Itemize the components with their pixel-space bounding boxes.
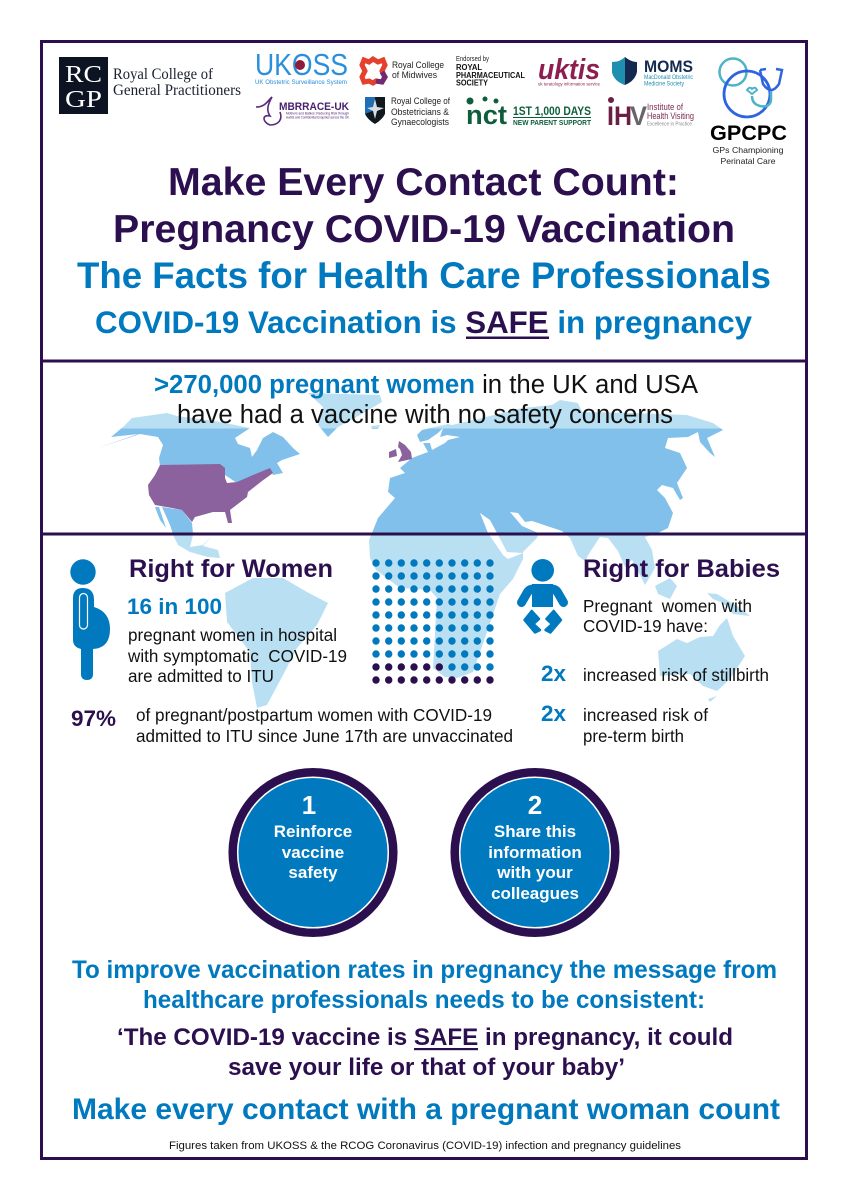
section: vaccine uptake statement: have had a vaccine with no safety concerns [177,401,673,429]
text: unvaccinated: of pregnant/postpartum women with COVID-19 [136,706,492,725]
logo: MOMS: Medicine Society [644,82,684,88]
logo: Royal Pharmaceutical Society [456,56,525,88]
call to action: Make every contact with a pregnant woman count [72,1093,780,1126]
icon: pregnant woman [70,559,110,680]
world map [98,393,750,708]
logo: Institute of Health Visiting: Excellence in Practice [647,122,692,128]
logo: RCGP: GP [65,87,102,113]
logo: MOMS: MacDonald Obstetric [644,75,693,81]
panel: right for babies [522,555,780,746]
stat: pre-term birth: pre-term birth [583,727,684,746]
logo: UKTIS: uk teratology information service [538,82,600,86]
stat: stillbirth [541,661,769,686]
logo: MOMS: MOMS [644,57,693,76]
heading: right for babies: Right for Babies [583,555,780,583]
map: Red Sea [480,513,523,559]
logo: RCGP: General Practitioners [113,82,241,99]
text: ITU admissions: with symptomatic COVID-19 [127,647,347,666]
logo: NCT First 1,000 Days: NEW PARENT SUPPORT [513,118,591,127]
text: consistency message [72,957,777,1014]
logo: Royal College of Midwives: of Midwives [392,70,437,80]
logo: MBRRACE-UK: Mothers and Babies: Reducing Risk through [286,112,349,116]
logo: MBRRACE-UK: MBRRACE-UK [279,101,349,113]
map: Australia [658,618,745,702]
section: vaccine uptake statement: >270,000 pregnant women in the UK and USA [154,371,698,399]
logo: UKOSS: UKOSS [255,47,348,82]
text: pregnant women with COVID-19: Pregnant women with [583,597,752,616]
closing message [72,957,780,1126]
callout circle 2 [455,772,615,933]
stat: pre-term birth: increased risk of [583,706,708,725]
subtitle: The Facts for Health Care Professionals [77,255,771,296]
logo: RCOG [365,96,450,127]
logo: NCT First 1,000 Days: nct [466,100,507,130]
map: Canada and Alaska [98,413,300,485]
logo: Royal Pharmaceutical Society: PHARMACEUTICAL [456,71,525,80]
stat: pre-term birth [541,701,708,746]
logo: Royal College of Midwives: Royal College [392,60,444,70]
logos row [59,47,787,166]
text: unvaccinated [136,706,513,746]
map: Greenland and Iceland [308,393,382,437]
title line 1: Make Every Contact Count: [168,160,679,204]
logo: Royal College of Midwives [362,59,444,83]
logo: GPCPC [710,58,787,166]
section: vaccine uptake statement [154,371,698,429]
logo: Royal Pharmaceutical Society: ROYAL [456,63,482,72]
map: Baja California [155,507,166,528]
text: ITU admissions [127,626,347,686]
logo: GPCPC: GPCPC [710,122,787,145]
icon: baby [522,559,564,632]
stat: stillbirth: 2x [541,661,566,686]
text: pregnant women with COVID-19: COVID-19 have: [583,617,708,636]
stat: 97%: 97% [71,706,116,731]
logo: Institute of Health Visiting [607,97,694,131]
text: consistency message: healthcare professionals needs to be consistent: [143,987,705,1014]
text: unvaccinated: admitted to ITU since June 17th are unvaccinated [136,727,513,746]
callout circle 1 [233,772,393,933]
logo: UKTIS: uktis [538,54,600,86]
callout circle 2: with your [496,863,573,882]
logo: NCT First 1,000 Days [466,96,591,130]
logo: Institute of Health Visiting: V [630,101,647,131]
heading: right for women: Right for Women [129,555,333,583]
text: ITU admissions: are admitted to ITU [128,667,274,686]
map highlight: USA [148,464,273,523]
logo: RCOG: Royal College of [391,96,450,106]
map: Mexico [162,507,193,534]
quote: save your life or that of your baby’ [228,1054,625,1081]
panel: right for women [70,555,513,746]
callout circle 1: Reinforce [274,822,352,841]
logo: Institute of Health Visiting: Health Visiting [647,111,694,121]
map: South America [225,578,328,708]
title line 2: Pregnancy COVID-19 Vaccination [113,207,735,251]
text: consistency message: To improve vaccination rates in pregnancy the message from [72,957,777,984]
logo: NCT First 1,000 Days: 1ST 1,000 DAYS [513,104,591,118]
stat: stillbirth: increased risk of stillbirth [583,666,769,685]
map: Eurasia and Africa [369,400,723,678]
callout circle 1: vaccine [282,843,344,862]
logo: Royal Pharmaceutical Society: SOCIETY [456,78,489,88]
logo: UKOSS: UK Obstetric Surveillance System [255,79,347,86]
map: Central America [173,535,220,558]
callout circle 2: information [488,843,582,862]
logo: Institute of Health Visiting: Institute of [647,102,683,112]
title block [77,160,771,340]
logo: RCOG: Obstetricians & [391,107,450,117]
logo: GPCPC: Perinatal Care [720,156,776,166]
logo: Royal Pharmaceutical Society: Endorsed by [456,56,489,63]
safety statement: COVID-19 Vaccination is SAFE in pregnancy [95,305,753,340]
logo: MBRRACE-UK: Audits and Confidential Enquiries across the UK [286,116,350,120]
quote: ‘The COVID-19 vaccine is SAFE in pregnancy, it could [117,1024,733,1051]
callout circle 1: 1 [302,790,316,820]
logo: GPCPC: GPs Championing [712,145,784,155]
text: ITU admissions: pregnant women in hospital [128,626,337,645]
dot grid: 16 in 100 [372,559,494,684]
callout circle 1: safety [288,863,338,882]
logo: RCOG: Gynaecologists [391,117,449,127]
callout circle 2: colleagues [491,884,579,903]
stat: pre-term birth: 2x [541,701,566,726]
map: Maritime Southeast Asia [655,578,750,616]
stat: 16 in 100: 16 in 100 [127,594,222,619]
text: pregnant women with COVID-19 [583,597,752,636]
map highlight: UK and Ireland [389,441,412,462]
logo: Institute of Health Visiting: IH [607,101,632,131]
logo: MOMS [612,57,693,88]
quote [117,1024,733,1081]
callout circle 2: Share this [494,822,576,841]
logo: RCGP [59,57,241,114]
footnote: Figures taken from UKOSS & the RCOG Coronavirus (COVID-19) infection and pregnancy guidelines [169,1140,681,1152]
callout circle 2: 2 [528,790,542,820]
logo: MBRRACE-UK [256,97,350,125]
logo: RCGP: RC [65,62,102,88]
logo: RCGP: Royal College of [113,66,214,83]
